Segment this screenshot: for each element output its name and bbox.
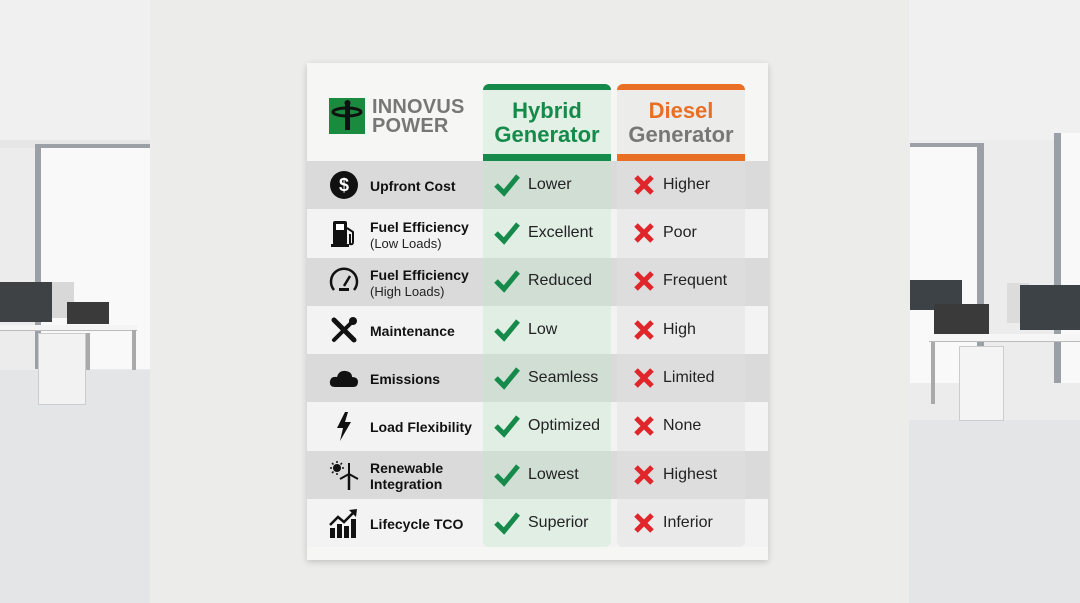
background: wall <box>150 0 909 603</box>
row: lifecycle tco <box>329 509 713 538</box>
row: lifecycle tco: Superior <box>528 514 588 531</box>
poster <box>307 63 768 560</box>
row: fuel high: (High Loads) <box>370 284 444 299</box>
row: load flexibility: Load Flexibility <box>370 419 472 435</box>
row: renewable <box>330 460 718 492</box>
header: diesel <box>628 98 734 147</box>
row: upfront cost: Higher <box>663 176 710 193</box>
row: fuel low: Poor <box>663 224 697 241</box>
row: maintenance: Maintenance <box>370 323 455 339</box>
row: renewable: Highest <box>663 466 717 483</box>
row: load flexibility <box>337 412 701 441</box>
icon: fuel pump <box>331 221 354 247</box>
logo <box>329 96 465 137</box>
table rows background <box>307 161 768 499</box>
row: renewable: Lowest <box>528 466 579 483</box>
row: fuel low: (Low Loads) <box>370 236 442 251</box>
icon: gauge <box>330 268 358 291</box>
row: fuel high: Frequent <box>663 272 727 289</box>
row: emissions: Seamless <box>528 369 598 386</box>
row: emissions: Limited <box>663 369 715 386</box>
icon: sun and turbine <box>330 461 358 490</box>
background: right office <box>909 0 1080 603</box>
row: load flexibility: None <box>663 417 701 434</box>
logo: POWER <box>372 115 449 137</box>
row: renewable: Integration <box>370 476 442 492</box>
header: hybrid: Hybrid <box>512 98 582 123</box>
row: fuel high: Reduced <box>528 272 592 289</box>
column: diesel <box>617 84 745 547</box>
row: lifecycle tco: Lifecycle TCO <box>370 516 463 532</box>
row: upfront cost <box>330 171 710 199</box>
header: diesel: Diesel <box>649 98 713 123</box>
icon: tools <box>332 317 357 342</box>
row: renewable: Renewable <box>370 460 443 476</box>
background: left office <box>0 0 150 603</box>
row: load flexibility: Optimized <box>528 417 600 434</box>
row: emissions: Emissions <box>370 371 440 387</box>
row: fuel high: Fuel Efficiency <box>370 267 469 283</box>
row: maintenance: High <box>663 321 696 338</box>
row: fuel high <box>330 267 727 299</box>
row: maintenance <box>332 317 696 342</box>
row: upfront cost: Upfront Cost <box>370 178 456 194</box>
column: hybrid <box>483 84 611 547</box>
header: hybrid <box>494 98 600 147</box>
row: fuel low <box>331 219 697 251</box>
icon: dollar: $ <box>339 175 349 195</box>
row: lifecycle tco: Inferior <box>663 514 713 531</box>
row: emissions <box>330 367 715 390</box>
row: fuel low: Excellent <box>528 224 593 241</box>
header: hybrid: Generator <box>494 122 600 147</box>
icon: lightning <box>337 412 351 441</box>
header underlines <box>483 154 611 161</box>
row: maintenance: Low <box>528 321 557 338</box>
row: fuel low: Fuel Efficiency <box>370 219 469 235</box>
logo: INNOVUS <box>372 96 465 118</box>
icon: dollar <box>330 171 358 199</box>
row: upfront cost: Lower <box>528 176 572 193</box>
icon: chart up <box>329 509 357 538</box>
icon: cloud <box>330 370 358 387</box>
header: diesel: Generator <box>628 122 734 147</box>
